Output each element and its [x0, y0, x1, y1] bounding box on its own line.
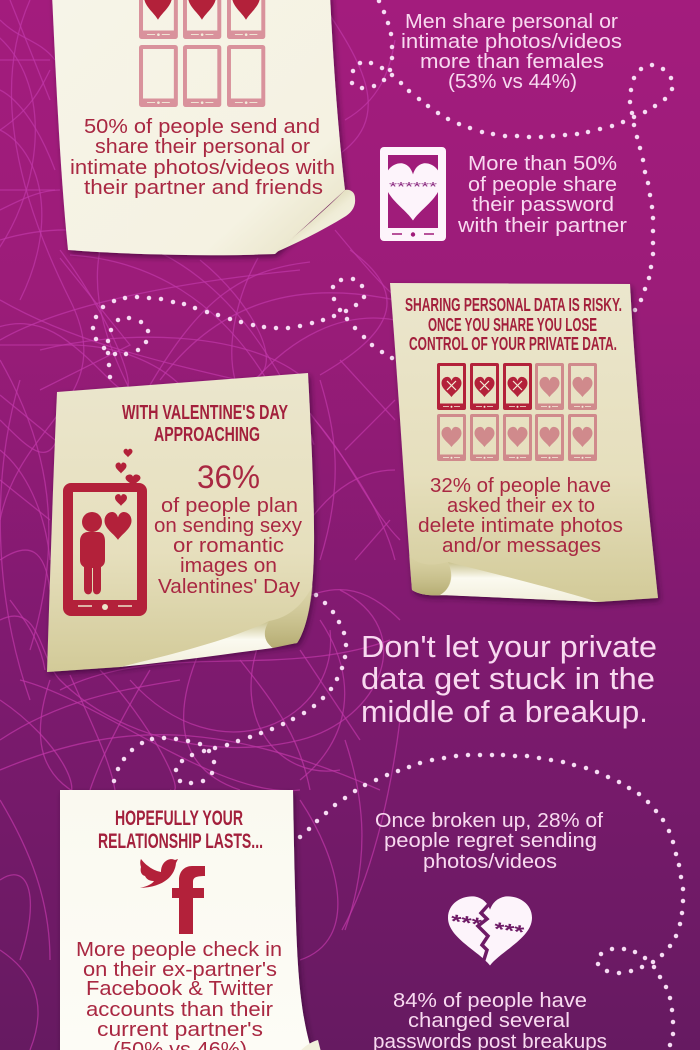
text: more people check ex-partner: Facebook & Twitter — [86, 978, 273, 1000]
text: more than 50% share password: their password — [472, 194, 614, 216]
text: 84% changed passwords: 84% of people have — [393, 990, 587, 1012]
text: more than 50% share password — [457, 153, 627, 237]
text: don't let your private data: middle of a breakup. — [361, 694, 648, 729]
icon: phone with password heart: ****** — [389, 179, 437, 194]
text: once broken up 28% regret: people regret sending — [384, 830, 597, 852]
heading: hopefully: RELATIONSHIP LASTS... — [98, 830, 263, 853]
text: more people check ex-partner: on their ex-partner's — [83, 959, 277, 981]
text: 36% plan on sending: of people plan — [161, 495, 298, 517]
text: once broken up 28% regret — [375, 810, 603, 873]
text: men share more than females: more than females — [420, 51, 604, 73]
text: 36% plan on sending — [154, 459, 302, 598]
text: 50% of people: 50% of people send and — [84, 116, 320, 138]
text: more than 50% share password: with their partner — [457, 215, 627, 237]
icon: phone with password heart — [380, 147, 446, 241]
heading: sharing personal data — [405, 295, 622, 354]
background scribbles — [0, 0, 400, 1050]
icon: broken heart with asterisks: *** — [492, 919, 526, 944]
icon: broken heart with asterisks — [448, 896, 532, 966]
text: men share more than females — [401, 11, 622, 93]
text: men share more than females: intimate photos/videos — [401, 31, 622, 53]
icon: twitter bird and facebook f — [140, 859, 205, 934]
text: 50% of people: their partner and friends — [84, 177, 323, 199]
icon: broken heart with asterisks: *** — [449, 911, 484, 936]
icon: ten phones with hearts — [437, 363, 597, 461]
text: don't let your private data: Don't let your private — [361, 629, 657, 664]
text: 50% of people: intimate photos/videos with — [70, 157, 335, 179]
text: more people check ex-partner — [76, 939, 282, 1050]
text: once broken up 28% regret: photos/videos — [423, 851, 557, 873]
text: 36% plan on sending: on sending sexy — [154, 515, 302, 537]
text: 36% plan on sending: images on — [180, 555, 277, 577]
text: 32% asked ex to delete: and/or messages — [442, 535, 601, 557]
text: 50% of people — [70, 116, 335, 199]
text: 84% changed passwords: changed several — [408, 1010, 570, 1032]
text: 50% of people: share their personal or — [95, 136, 310, 158]
panel: hopefully your relationship lasts note — [60, 790, 322, 1050]
heading: hopefully — [98, 807, 263, 853]
heading: hopefully: HOPEFULLY YOUR — [115, 807, 243, 830]
text: once broken up 28% regret: Once broken up, 28% of — [375, 810, 603, 832]
text: 32% asked ex to delete: delete intimate photos — [418, 515, 623, 537]
text: men share more than females: Men share personal or — [405, 11, 618, 33]
text: more people check ex-partner: More people check in — [76, 939, 282, 961]
text: 36% plan on sending: Valentines' Day — [158, 576, 300, 598]
panel: valentine's day note — [47, 373, 314, 672]
panel: sharing is risky note — [390, 283, 658, 602]
text: more than 50% share password: of people share — [468, 174, 617, 196]
text: more people check ex-partner: current partner's — [97, 1019, 263, 1041]
text: 84% changed passwords — [373, 990, 607, 1050]
text: 36% plan on sending: or romantic — [173, 535, 284, 557]
heading: with valentine's day approaching — [122, 402, 288, 446]
text: 32% asked ex to delete: 32% of people have — [430, 475, 611, 497]
text: don't let your private data: data get stuck in the — [361, 661, 655, 696]
heading: with valentine's day approaching: APPROACHING — [154, 424, 260, 446]
icon: six phones with three hearts — [139, 0, 265, 107]
text: 32% asked ex to delete — [418, 475, 623, 557]
text: more than 50% share password: More than 50% — [468, 153, 617, 175]
text: more people check ex-partner: accounts than their — [86, 999, 273, 1021]
heading: with valentine's day approaching: WITH VALENTINE'S DAY — [122, 402, 288, 424]
text: 36% plan on sending: 36% — [197, 459, 260, 495]
text: 32% asked ex to delete: asked their ex to — [447, 495, 595, 517]
heading: sharing personal data: ONCE YOU SHARE YOU LOSE — [428, 315, 597, 335]
panel: 50% share photos note — [52, 0, 355, 255]
icon: phone with person and hearts — [63, 449, 147, 616]
text: men share more than females: (53% vs 44%) — [448, 71, 577, 93]
text: don't let your private data — [361, 629, 657, 729]
